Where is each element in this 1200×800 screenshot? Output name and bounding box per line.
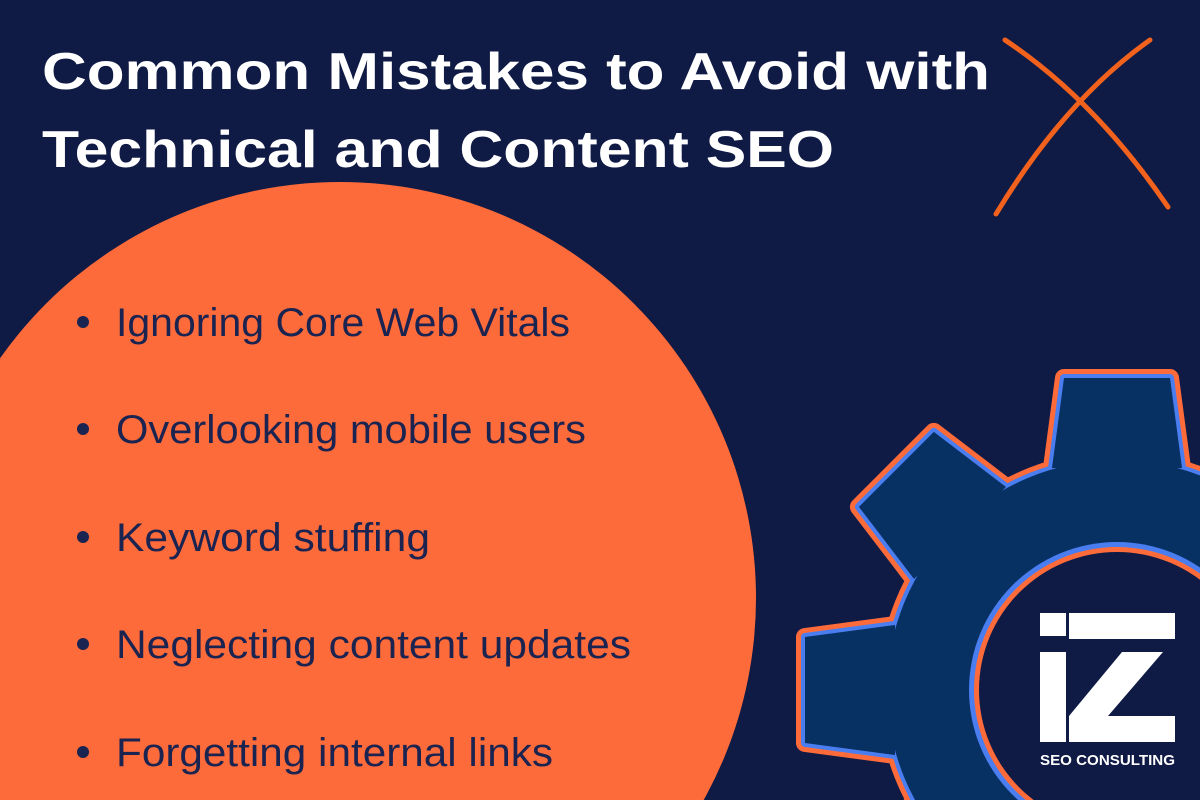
title: Technical and Content SEO: [42, 121, 834, 179]
bullet list: Ignoring Core Web Vitals: [116, 301, 570, 345]
icon: gear with logo: [805, 378, 1200, 800]
bullet list: [77, 301, 631, 775]
icon: orange X: [996, 40, 1168, 214]
title: Common Mistakes to Avoid with: [42, 43, 990, 101]
title: [42, 43, 990, 179]
bullet list: Neglecting content updates: [116, 623, 631, 667]
orange circle: [0, 182, 756, 800]
bullet list: Overlooking mobile users: [116, 408, 586, 452]
logo: iZ SEO Consulting: [1040, 613, 1175, 769]
bullet list: Forgetting internal links: [116, 731, 553, 775]
logo: iZ SEO Consulting: SEO CONSULTING: [1040, 752, 1175, 769]
bullet list: Keyword stuffing: [116, 516, 430, 560]
